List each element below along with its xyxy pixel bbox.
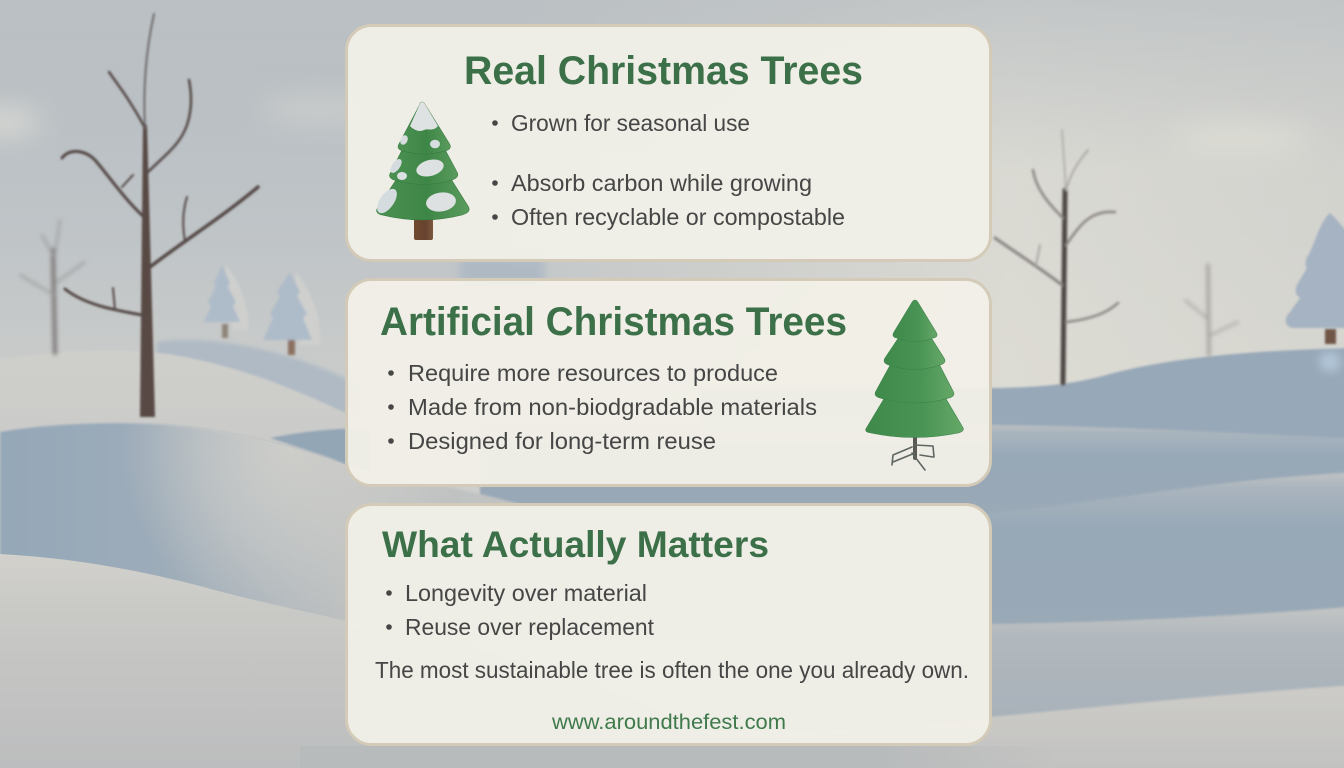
bullet list: artificial trees: Require more resources to produce — [408, 360, 778, 386]
panel: real christmas trees — [346, 26, 990, 260]
bare tree, right distant — [1185, 265, 1238, 355]
bullet list: real trees — [492, 110, 845, 230]
closing statement: The most sustainable tree is often the one you already own. — [375, 657, 969, 683]
bullet list: real trees: Often recyclable or compostable — [511, 204, 845, 230]
heading: real christmas trees: Real Christmas Trees — [464, 49, 863, 93]
panel: artificial christmas trees — [346, 280, 990, 486]
bullet list: real trees: Grown for seasonal use — [511, 110, 750, 136]
bullet list: artificial trees: Made from non-biodgradable materials — [408, 394, 817, 420]
bare tree, right — [995, 130, 1118, 383]
bullet list: artificial trees: Designed for long-term reuse — [408, 428, 716, 454]
bare tree, left foreground — [62, 14, 258, 417]
bullet list: what matters: Reuse over replacement — [405, 614, 655, 640]
bullet list: artificial trees — [388, 360, 817, 454]
website link: www.aroundthefest.com — [551, 711, 786, 734]
panel: what actually matters — [346, 504, 990, 744]
distant fir trees, left — [204, 265, 320, 355]
heading: what actually matters: What Actually Matters — [382, 524, 769, 565]
icon: snowy real tree — [373, 102, 469, 240]
bare tree, left distant — [20, 220, 85, 353]
bullet list: what matters — [386, 580, 655, 640]
icon: artificial tree — [866, 300, 963, 470]
heading: artificial christmas trees: Artificial Christmas Trees — [380, 300, 847, 344]
distant fir tree, right — [1286, 213, 1344, 344]
bullet list: what matters: Longevity over material — [405, 580, 647, 606]
bullet list: real trees: Absorb carbon while growing — [511, 170, 812, 196]
